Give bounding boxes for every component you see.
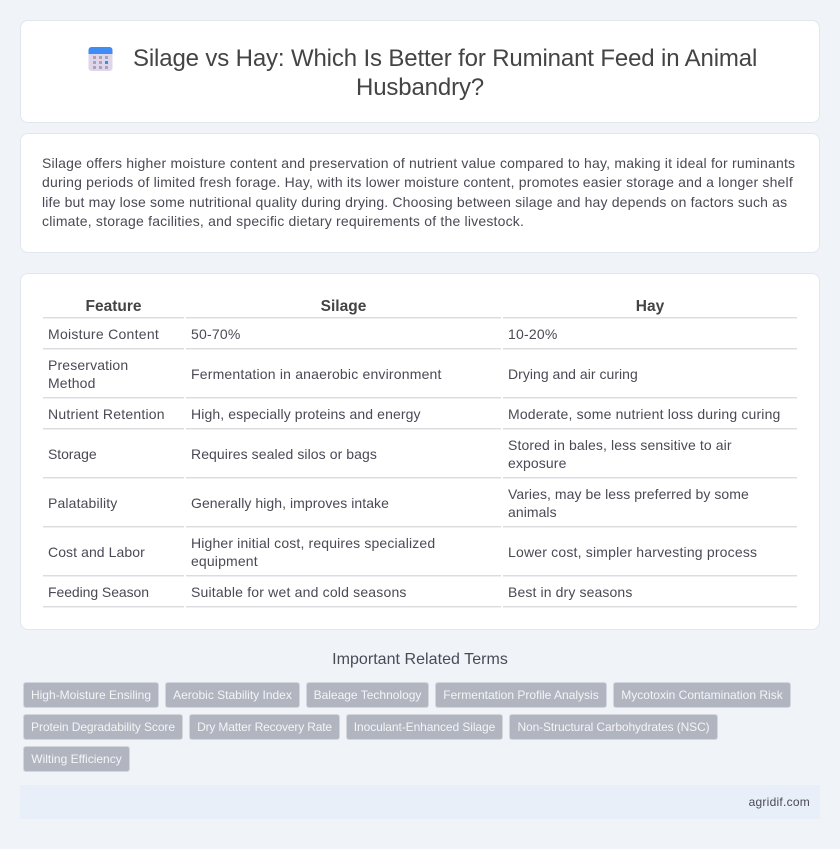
comparison table: Drying and air curing: [508, 366, 638, 382]
comparison table: 10-20%: [508, 326, 558, 342]
comparison table: Cost and Labor: [48, 544, 145, 560]
icon: calendar: [88, 47, 112, 71]
title: Husbandry?: [356, 74, 484, 101]
related term tags: Wilting Efficiency: [31, 752, 122, 766]
intro paragraph: Silage offers higher moisture content and preservation of nutrient value compared to hay, making it ideal for ruminants: [42, 155, 795, 171]
comparison table: 50-70%: [191, 326, 241, 342]
related term tags: Protein Degradability Score: [31, 720, 175, 734]
comparison table: Fermentation in anaerobic environment: [191, 366, 442, 382]
comparison table: exposure: [508, 455, 566, 471]
comparison table: Silage: [321, 298, 366, 315]
intro paragraph: during periods of limited fresh forage. Hay, with its lower moisture content, promotes easier storage and a longer shelf: [42, 174, 793, 190]
footer source: agridif.com: [749, 795, 810, 809]
footer bar: [20, 785, 820, 819]
comparison table panel: [20, 273, 820, 630]
comparison table: animals: [508, 504, 557, 520]
related term tags: High-Moisture Ensiling: [31, 688, 151, 702]
comparison table: Higher initial cost, requires specialized: [191, 535, 435, 551]
intro text panel: [20, 133, 820, 253]
comparison table: Varies, may be less preferred by some: [508, 486, 749, 502]
related term tags: Aerobic Stability Index: [173, 688, 292, 702]
title: [133, 45, 757, 101]
comparison table: Feature: [86, 298, 142, 315]
related term tags: Baleage Technology: [314, 688, 421, 702]
comparison table: Suitable for wet and cold seasons: [191, 584, 407, 600]
related term tags: Non-Structural Carbohydrates (NSC): [518, 720, 710, 734]
comparison table: Hay: [636, 298, 664, 315]
intro paragraph: [42, 155, 795, 229]
comparison table: Method: [48, 375, 96, 391]
comparison table: Best in dry seasons: [508, 584, 632, 600]
related term tags: Inoculant-Enhanced Silage: [354, 720, 495, 734]
comparison table: equipment: [191, 553, 258, 569]
comparison table: Storage: [48, 446, 97, 462]
comparison table: Stored in bales, less sensitive to air: [508, 437, 732, 453]
comparison table: Requires sealed silos or bags: [191, 446, 377, 462]
header panel: [20, 20, 820, 123]
comparison table: Moisture Content: [48, 326, 159, 342]
related term tags: Dry Matter Recovery Rate: [197, 720, 332, 734]
comparison table: Preservation: [48, 357, 128, 373]
related terms heading: Important Related Terms: [332, 651, 508, 668]
comparison table: Feeding Season: [48, 584, 149, 600]
comparison table: Generally high, improves intake: [191, 495, 389, 511]
comparison table: Palatability: [48, 495, 117, 511]
title: Silage vs Hay: Which Is Better for Ruminant Feed in Animal: [133, 45, 757, 72]
comparison table: High, especially proteins and energy: [191, 406, 421, 422]
comparison table: Moderate, some nutrient loss during curing: [508, 406, 780, 422]
comparison table: Lower cost, simpler harvesting process: [508, 544, 757, 560]
related term tags: [23, 682, 791, 772]
comparison table: [43, 298, 797, 608]
related term tags: Fermentation Profile Analysis: [443, 688, 599, 702]
related term tags: Mycotoxin Contamination Risk: [621, 688, 783, 702]
intro paragraph: climate, storage facilities, and specific dietary requirements of the livestock.: [42, 213, 524, 229]
comparison table: Nutrient Retention: [48, 406, 165, 422]
intro paragraph: life but may lose some nutritional quality during drying. Choosing between silage and hay depends on factors such as: [42, 194, 787, 210]
